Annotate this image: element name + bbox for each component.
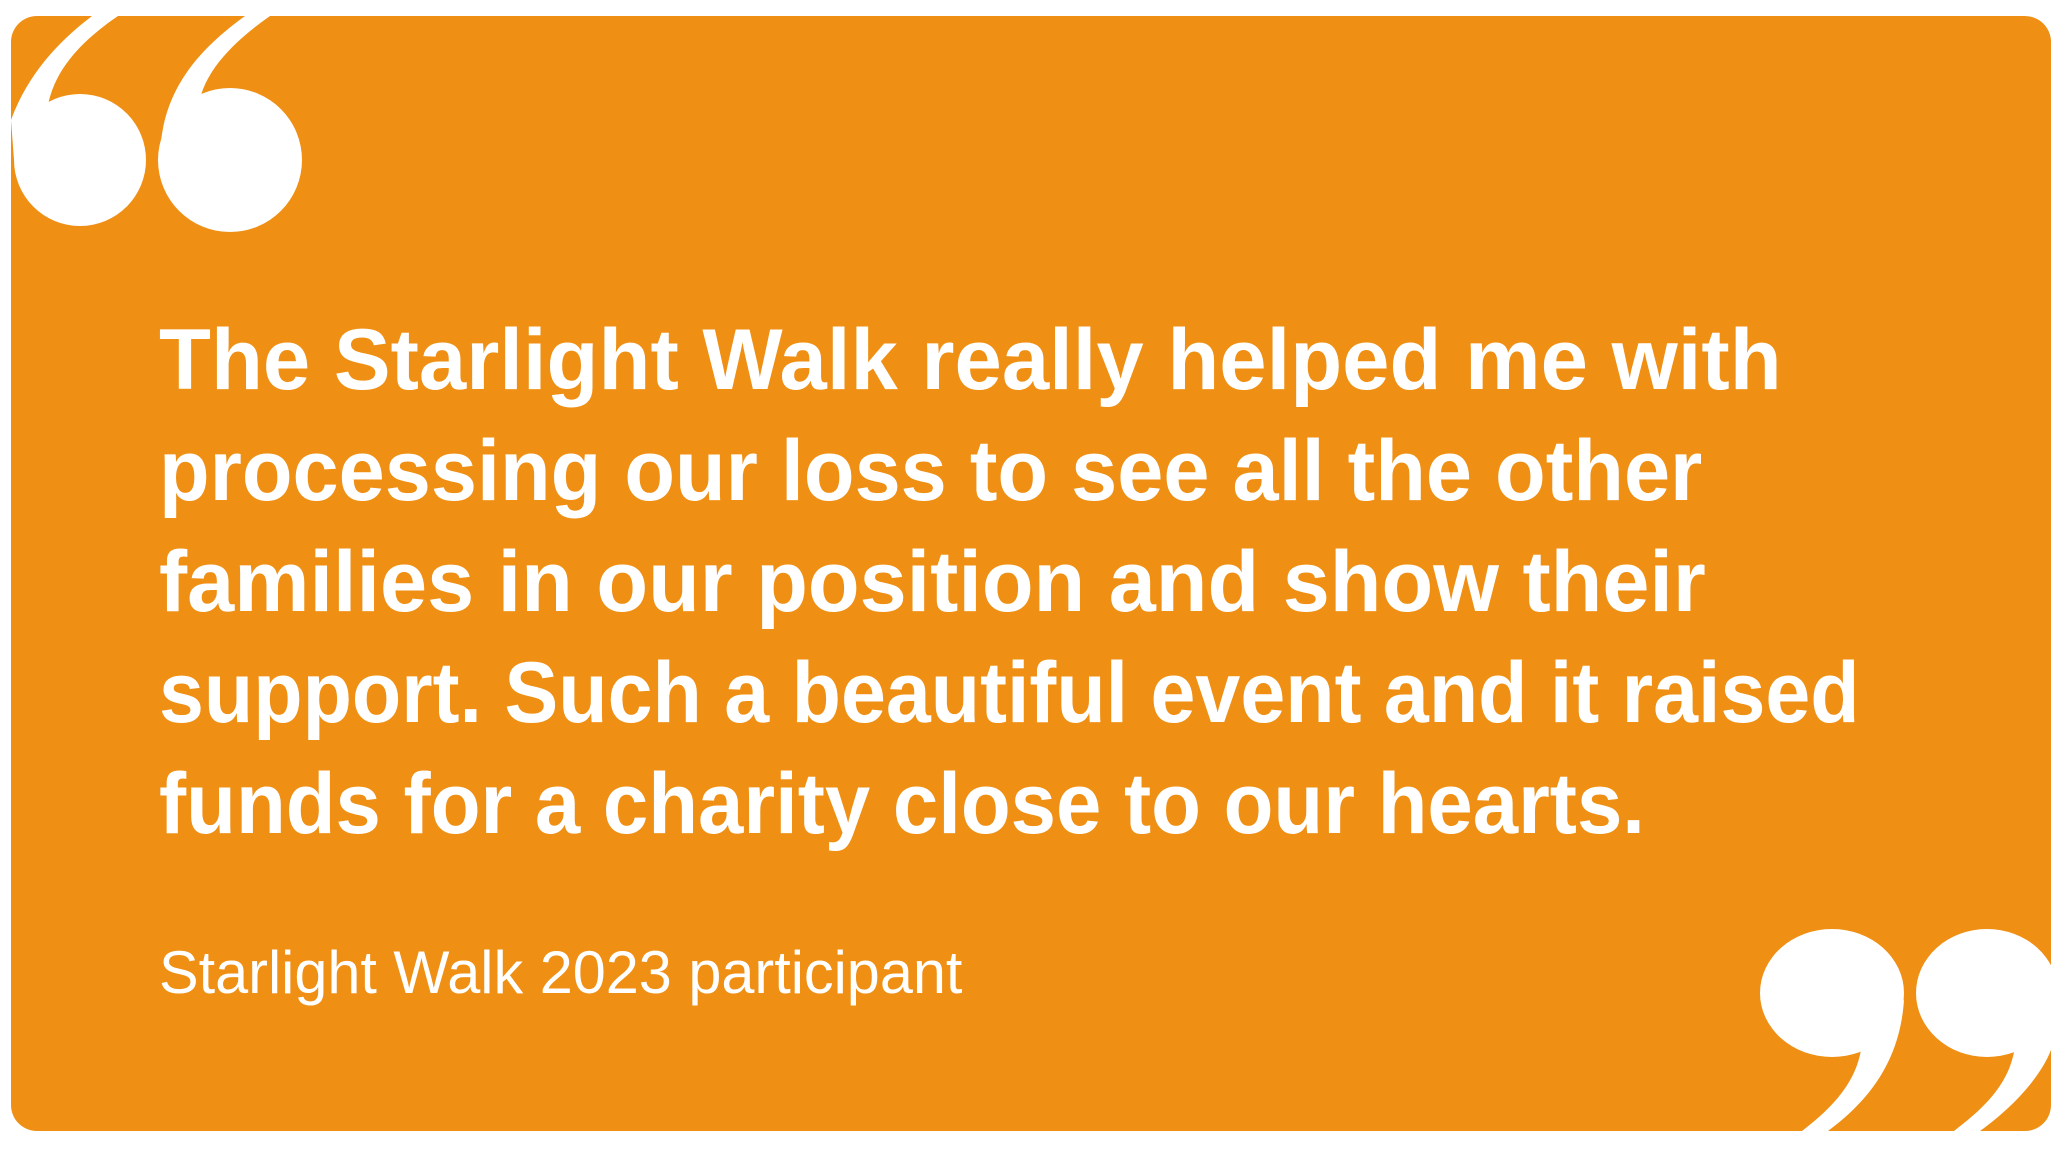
text block: quote: support. Such a beautiful event and it raised [159,645,1860,741]
text block: quote: funds for a charity close to our hearts. [159,756,1645,852]
text block: quote: processing our loss to see all the other [159,423,1702,519]
text block: quote: The Starlight Walk really helped me with [159,312,1782,408]
text block: quote: families in our position and show their [159,534,1706,630]
text block: quote [159,312,1860,852]
text block: attribution: Starlight Walk 2023 participant [159,939,962,1006]
